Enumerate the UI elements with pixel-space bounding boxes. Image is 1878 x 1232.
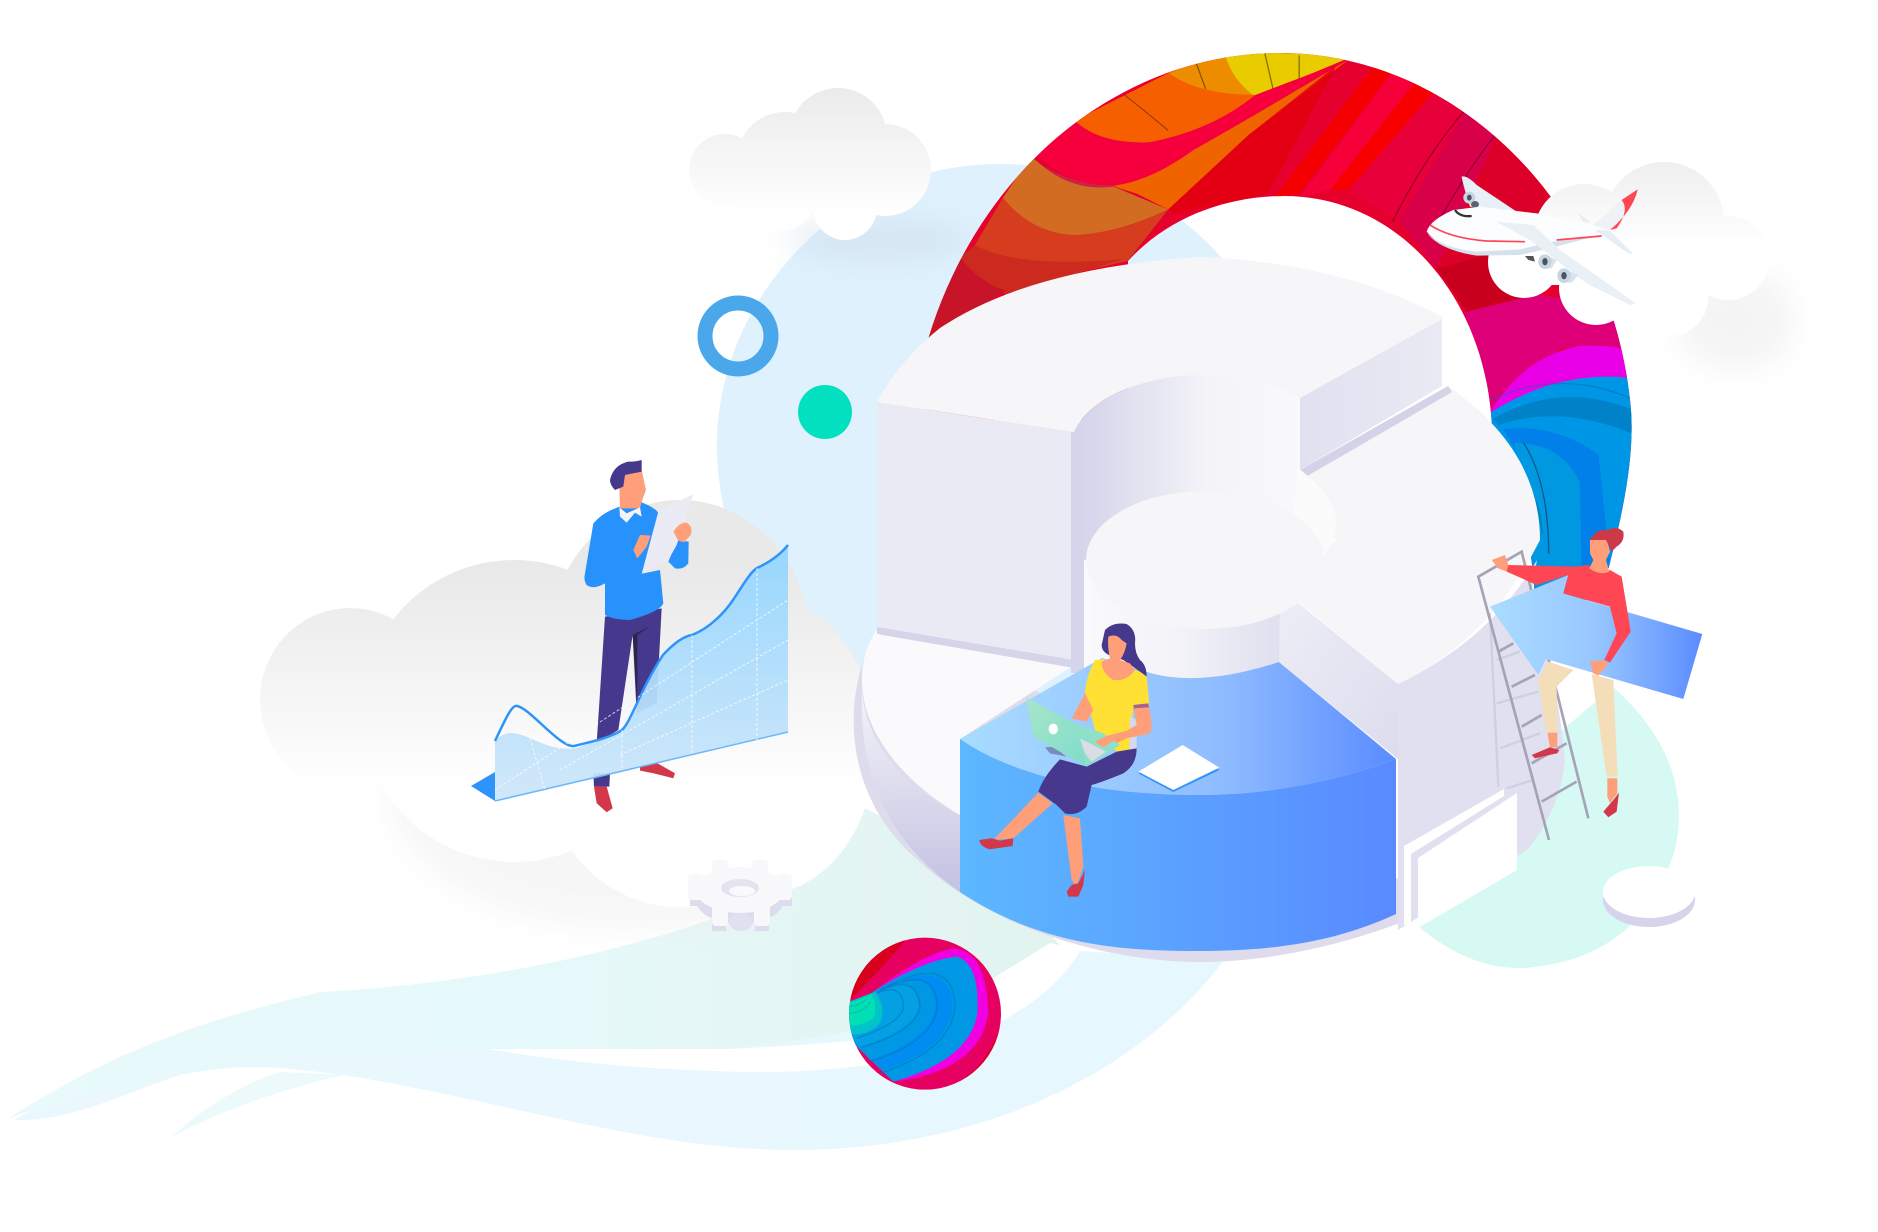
stripe — [1430, 225, 1602, 242]
legs — [597, 608, 662, 743]
ladder shadow — [1490, 613, 1540, 788]
head — [619, 470, 646, 508]
second disc top — [1086, 491, 1324, 629]
face and neck — [1102, 636, 1135, 680]
inner cylinder — [1074, 375, 1300, 665]
paper sheet — [1138, 747, 1219, 792]
cloud: right behind plane — [1488, 162, 1770, 336]
rainbow arch — [925, 53, 1632, 600]
blue top surface — [960, 658, 1396, 795]
background blob: mint — [1418, 687, 1679, 968]
fuselage — [1427, 207, 1597, 255]
stabilizer — [1595, 230, 1633, 254]
ladder and arrow woman — [1478, 528, 1702, 840]
hand left — [633, 535, 651, 558]
groove — [1300, 386, 1452, 478]
back right wall — [1300, 316, 1442, 470]
light bulge — [1290, 468, 1336, 562]
gear icon — [688, 860, 792, 931]
sleeve band — [1133, 703, 1149, 709]
ladder — [1478, 552, 1588, 840]
head — [1589, 538, 1610, 573]
engines — [1545, 255, 1557, 268]
bottom waves — [9, 800, 1224, 1150]
hair — [1590, 528, 1624, 552]
upper engines — [1463, 192, 1475, 204]
hand right — [673, 523, 691, 542]
sweater — [584, 502, 663, 620]
man figure — [584, 460, 693, 812]
shoes — [640, 763, 675, 778]
cloud shadows — [380, 218, 1795, 930]
ring decoration — [705, 303, 771, 369]
upper left wall — [877, 402, 1074, 662]
shoes — [1532, 747, 1559, 758]
torso shade — [1129, 717, 1137, 750]
laptop — [1045, 747, 1067, 757]
hair — [1102, 623, 1147, 677]
right top surface — [1282, 386, 1540, 684]
arrow — [1490, 575, 1702, 699]
side wall by blue — [1279, 588, 1398, 759]
neck cylinder — [1084, 560, 1280, 678]
ankles — [1547, 733, 1557, 747]
rainbow sphere — [847, 935, 1003, 1093]
shirt — [1085, 659, 1149, 752]
right leg — [1592, 674, 1618, 777]
area chart — [471, 545, 788, 801]
3D platform block — [854, 257, 1565, 962]
lower left wall — [862, 690, 960, 892]
cloud: behind man — [260, 500, 876, 907]
legs — [993, 793, 1053, 840]
left leg — [1538, 662, 1573, 732]
collar — [619, 507, 642, 523]
hands — [1492, 555, 1508, 572]
small white disc — [1603, 866, 1695, 927]
right wall outer — [1398, 560, 1565, 930]
woman with laptop — [979, 623, 1219, 897]
arms — [1095, 707, 1151, 747]
upper wing — [1462, 176, 1517, 212]
plane — [1427, 176, 1638, 305]
main wing — [1496, 222, 1636, 305]
sweater and arm — [1507, 565, 1631, 663]
skirt — [1038, 748, 1137, 814]
outer rim — [854, 620, 1420, 962]
cockpit — [1455, 210, 1472, 216]
blue front — [960, 739, 1396, 951]
shoes — [979, 838, 1013, 849]
tail fin — [1593, 189, 1638, 230]
lower left top surface — [862, 630, 1074, 815]
teal dot — [798, 385, 852, 439]
white step box — [1404, 789, 1517, 928]
large top surface — [877, 257, 1444, 432]
paper — [642, 494, 693, 574]
hair — [610, 460, 642, 490]
background blob: light blue — [717, 164, 1225, 700]
cloud: top left — [689, 88, 931, 240]
